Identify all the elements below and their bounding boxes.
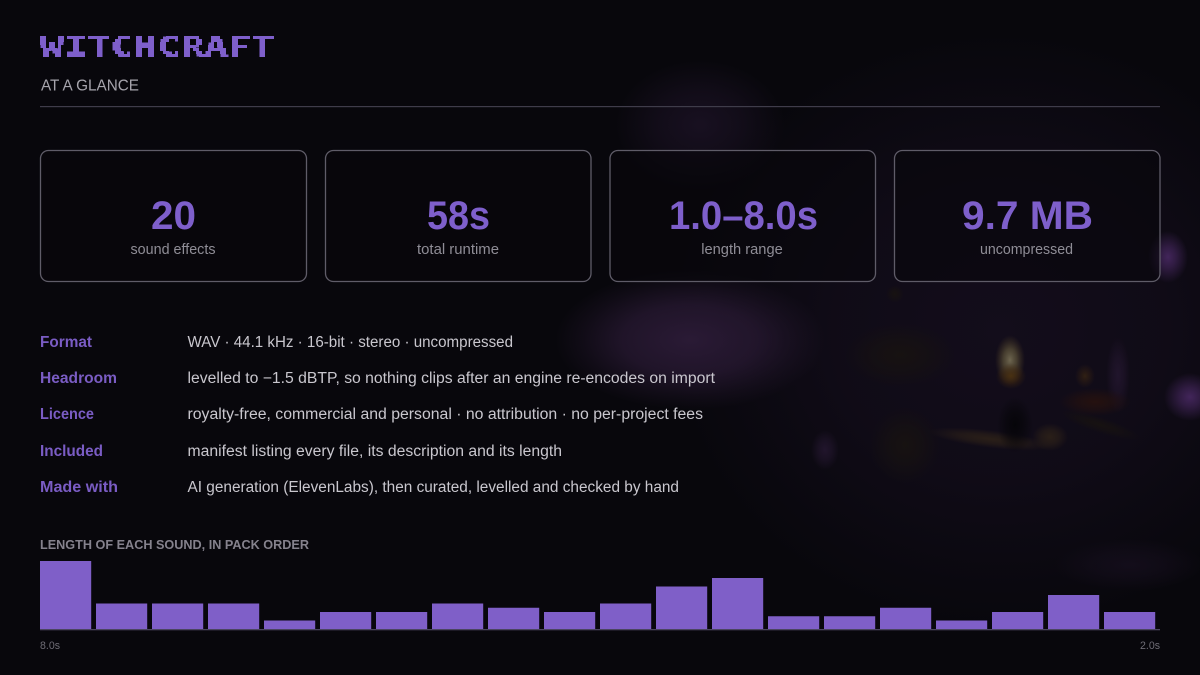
row: headroom: levelled to −1.5 dBTP, so nothing clips after an engine re-encodes on import: [188, 370, 716, 387]
card: sound effects: 20: [151, 194, 196, 238]
row: made with: AI generation (ElevenLabs), then curated, levelled and checked by hand: [188, 479, 679, 496]
card: length range: 1.0–8.0s: [669, 194, 818, 238]
spec list: [40, 334, 716, 496]
row: licence: Licence: [40, 406, 94, 423]
stat cards: [40, 150, 1160, 282]
card: uncompressed: uncompressed: [980, 242, 1073, 258]
card: total runtime: total runtime: [417, 242, 499, 258]
card: uncompressed: [894, 150, 1160, 282]
chart heading: LENGTH OF EACH SOUND, IN PACK ORDER: [40, 538, 309, 552]
row: format: Format: [40, 334, 92, 351]
card: length range: length range: [701, 242, 783, 258]
subtitle: AT A GLANCE: [41, 78, 139, 94]
row: licence: royalty-free, commercial and personal · no attribution · no per-project fees: [188, 406, 703, 423]
row: headroom: Headroom: [40, 370, 117, 387]
card: sound effects: sound effects: [130, 242, 216, 258]
card: length range: [610, 150, 876, 282]
row: format: WAV · 44.1 kHz · 16-bit · stereo · uncompressed: [188, 334, 513, 351]
axis label: last sound: 2.0s: [1140, 640, 1160, 652]
card: uncompressed: 9.7 MB: [962, 194, 1093, 238]
card: total runtime: 58s: [427, 194, 490, 238]
row: made with: Made with: [40, 479, 118, 496]
bar chart: length of each sound: [40, 561, 1160, 630]
row: format: [40, 334, 513, 351]
card: sound effects: [40, 150, 306, 282]
card: total runtime: [326, 150, 591, 282]
row: included: Included: [40, 443, 103, 460]
axis label: first sound: 8.0s: [40, 640, 60, 652]
title: WITCHCRAFT: [40, 31, 275, 63]
row: included: manifest listing every file, its description and its length: [188, 443, 562, 460]
